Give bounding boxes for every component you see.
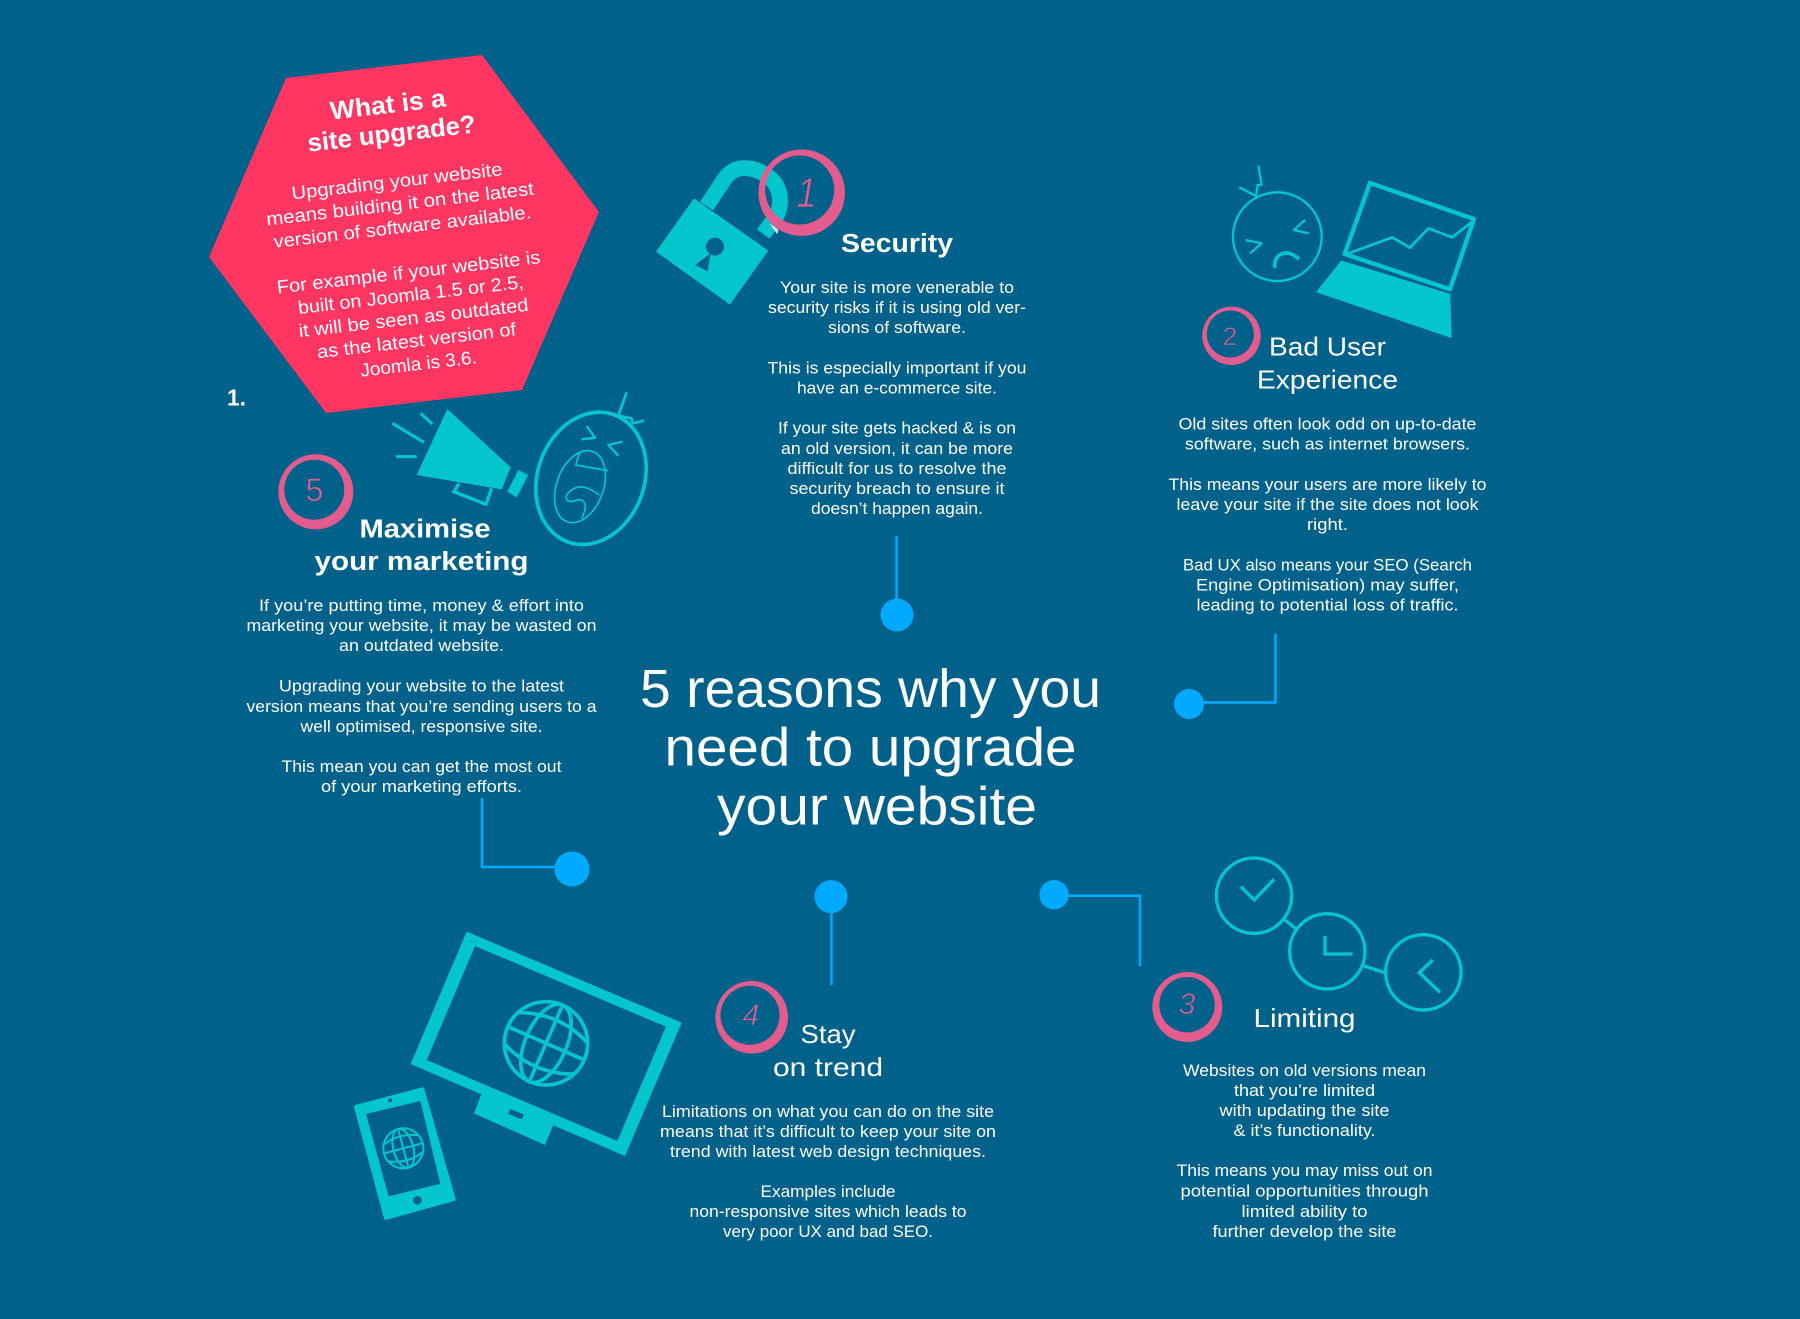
text block: security: security risks if it is using old ver-	[768, 299, 1026, 317]
heading: bad user experience	[1257, 332, 1398, 394]
hexagon text: example: Joomla is 3.6.	[359, 346, 478, 381]
text block: maximise your marketing: of your marketing efforts.	[321, 778, 522, 796]
panel: 1 security	[656, 149, 1026, 632]
text block: security: If your site gets hacked & is on	[778, 420, 1016, 438]
text block: limiting: further develop the site	[1212, 1223, 1396, 1241]
heading: bad user experience: Bad User	[1269, 332, 1386, 362]
text block: bad user experience: Engine Optimisation) may suffer,	[1196, 576, 1459, 594]
text block: maximise your marketing: Upgrading your website to the latest	[279, 678, 564, 696]
text block: security: This is especially important if you	[768, 360, 1026, 378]
heading: maximise your marketing: your marketing	[314, 548, 528, 576]
text block: stay on trend: Limitations on what you can do on the site	[662, 1103, 994, 1121]
hexagon text: definition	[265, 158, 535, 252]
hexagon heading: site upgrade?	[306, 110, 477, 158]
text block: limiting: potential opportunities through	[1180, 1182, 1428, 1200]
icon: monitor with globe	[411, 932, 682, 1156]
text block: maximise your marketing: If you’re putting time, money & effort into	[259, 597, 584, 615]
hexagon text: example	[276, 246, 541, 381]
title: your website	[717, 776, 1037, 836]
text block: security: security breach to ensure it	[790, 480, 1005, 498]
text block: stay on trend: Examples include	[760, 1183, 896, 1201]
text block: limiting: & it’s functionality.	[1234, 1122, 1376, 1140]
text block: bad user experience: right.	[1307, 516, 1348, 534]
number badge 2	[1202, 307, 1261, 365]
hexagon text: definition: Upgrading your website	[290, 158, 503, 203]
icon: megaphone	[392, 409, 528, 504]
hexagon text: example: as the latest version of	[316, 318, 518, 362]
text block: bad user experience	[1168, 416, 1486, 614]
text block: stay on trend: trend with latest web design techniques.	[670, 1143, 986, 1161]
text block: bad user experience: leading to potential loss of traffic.	[1196, 596, 1458, 614]
panel: 3 limiting	[1039, 858, 1461, 1241]
text block: maximise your marketing: This mean you can get the most out	[282, 758, 562, 776]
text block: maximise your marketing: marketing your website, it may be wasted on	[246, 617, 596, 635]
number badge 3: 3	[1178, 988, 1196, 1021]
text block: limiting: with updating the site	[1218, 1102, 1390, 1120]
text block: bad user experience: leave your site if the site does not look	[1176, 496, 1479, 514]
title: need to upgrade	[664, 718, 1076, 778]
hexagon text: example: built on Joomla 1.5 or 2.5,	[297, 271, 525, 318]
text block: stay on trend: means that it’s difficult to keep your site on	[660, 1123, 996, 1141]
text block: bad user experience: Old sites often look odd on up-to-date	[1178, 416, 1476, 434]
text block: limiting	[1176, 1062, 1432, 1241]
title	[640, 659, 1101, 836]
hexagon text: definition: means building it on the latest	[265, 178, 535, 229]
heading: bad user experience: Experience	[1257, 364, 1398, 394]
connector 3	[1039, 880, 1140, 966]
text block: limiting: Websites on old versions mean	[1183, 1062, 1426, 1080]
text block: bad user experience: software, such as internet browsers.	[1185, 436, 1470, 454]
text block: security: Your site is more venerable to	[780, 279, 1014, 297]
number badge 1: 1	[796, 169, 816, 216]
icon: linked clocks	[1216, 858, 1461, 1010]
connector 5	[482, 798, 590, 886]
icon: annoyed face	[1233, 166, 1322, 281]
number badge 3	[1152, 972, 1222, 1042]
connector 4	[814, 880, 848, 985]
number badge 2: 2	[1222, 323, 1238, 351]
text block: maximise your marketing	[246, 597, 597, 796]
heading: maximise your marketing	[314, 516, 528, 576]
number badge 4: 4	[742, 999, 760, 1032]
icon: phone with globe	[356, 1089, 454, 1218]
heading: maximise your marketing: Maximise	[360, 516, 490, 544]
text block: security: doesn’t happen again.	[811, 500, 983, 518]
icon: padlock	[656, 168, 780, 305]
hexagon text: example: it will be seen as outdated	[298, 294, 529, 341]
text block: stay on trend	[660, 1103, 996, 1241]
hexagon heading: What is a	[329, 84, 448, 126]
text block: stay on trend: non-responsive sites which leads to	[690, 1203, 966, 1221]
hexagon text: example: For example if your website is	[276, 246, 541, 298]
text block: security: difficult for us to resolve the	[788, 460, 1006, 478]
heading: limiting: Limiting	[1254, 1003, 1356, 1033]
panel: 5 maximise your marketing	[246, 392, 664, 886]
panel: 4 stay on trend	[356, 880, 996, 1241]
text block: maximise your marketing: an outdated website.	[339, 637, 504, 655]
heading: stay on trend: on trend	[773, 1052, 883, 1082]
connector 1	[880, 536, 914, 632]
text block: security	[768, 279, 1026, 518]
text block: security: have an e-commerce site.	[797, 380, 997, 398]
number badge 1	[758, 149, 845, 236]
icon: laptop with chart	[1318, 183, 1474, 337]
text block: security: an old version, it can be more	[781, 440, 1013, 458]
heading: stay on trend	[773, 1019, 883, 1082]
text block: stay on trend: very poor UX and bad SEO.	[723, 1223, 933, 1241]
text block: maximise your marketing: well optimised, responsive site.	[299, 718, 542, 736]
hexagon heading	[306, 84, 477, 158]
panel: 2 bad user experience	[1168, 166, 1486, 719]
text block: limiting: limited ability to	[1242, 1203, 1368, 1221]
text block: limiting: This means you may miss out on	[1176, 1162, 1432, 1180]
number badge 5	[278, 454, 353, 529]
title: 5 reasons why you	[640, 659, 1101, 719]
hexagon text: definition: version of software available.	[272, 201, 532, 252]
panel: what is a site upgrade hexagon	[209, 55, 599, 413]
text block: maximise your marketing: version means that you’re sending users to a	[246, 698, 597, 716]
text block: security: sions of software.	[828, 319, 966, 337]
number badge 4	[715, 981, 788, 1054]
text block: bad user experience: This means your users are more likely to	[1168, 476, 1486, 494]
heading: security: Security	[841, 230, 954, 258]
number badge 5: 5	[306, 472, 324, 508]
text block: limiting: that you’re limited	[1234, 1082, 1375, 1100]
stray label 1.: 1.	[227, 385, 246, 411]
icon: shouting face	[518, 392, 664, 560]
text block: bad user experience: Bad UX also means your SEO (Search	[1183, 556, 1472, 574]
connector 2	[1174, 634, 1276, 719]
heading: stay on trend: Stay	[800, 1019, 856, 1049]
